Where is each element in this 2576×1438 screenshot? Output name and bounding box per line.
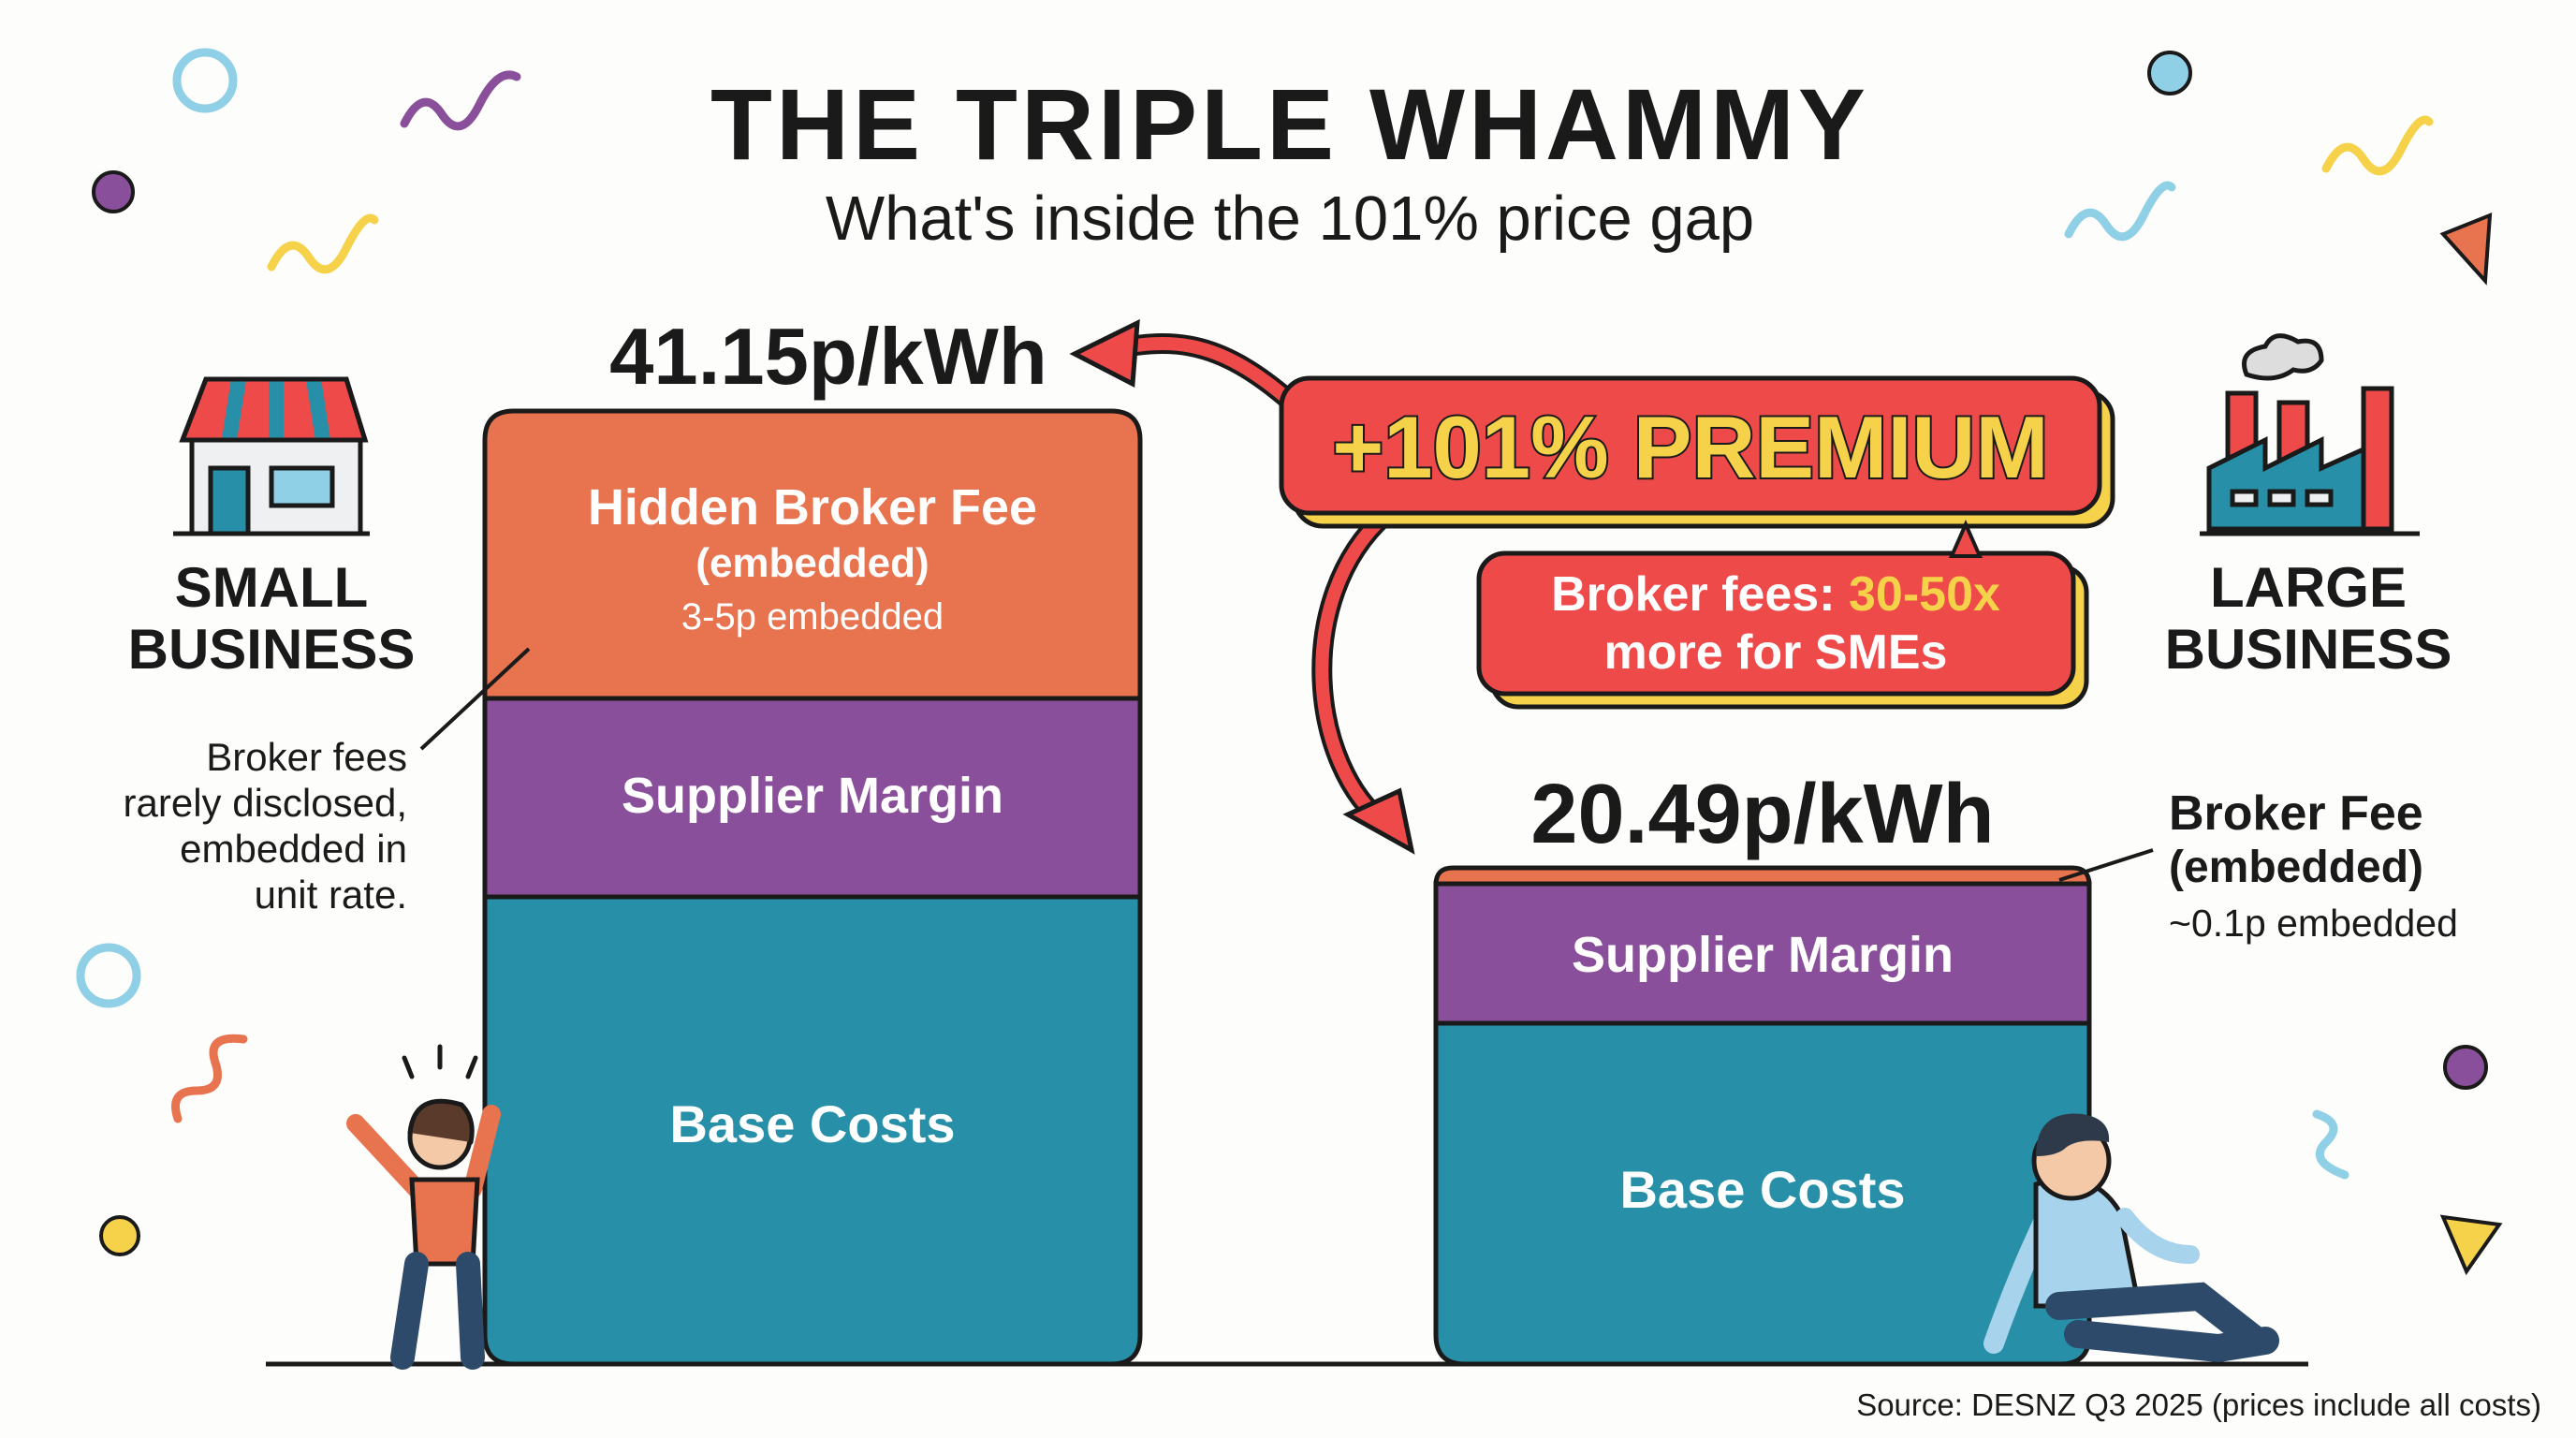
label: large business: LARGE <box>2210 556 2407 619</box>
note: broker fees rarely disclosed <box>124 649 529 917</box>
left bar: small business: 3-5p embedded <box>681 596 944 638</box>
text: BUSINESS <box>128 618 415 681</box>
note: broker fees rarely disclosed: Broker fees <box>206 735 407 779</box>
callout: broker fees 30-50x: Broker fees: 30-50x <box>1551 567 2000 622</box>
decorative confetti <box>80 52 2499 1271</box>
left bar: small business: Base Costs <box>669 1094 956 1153</box>
note: large broker fee: Broker Fee <box>2169 786 2423 841</box>
right price label: 20.49p/kWh <box>1530 768 1995 861</box>
note: large broker fee: ~0.1p embedded <box>2169 902 2458 945</box>
note: broker fees rarely disclosed: rarely disclosed, <box>124 781 407 825</box>
left bar: small business: (embedded) <box>695 540 929 586</box>
baseline <box>266 1361 2308 1367</box>
text: BUSINESS <box>2165 618 2452 681</box>
left price label: 41.15p/kWh <box>609 313 1047 402</box>
callout: broker fees 30-50x <box>1479 524 2086 707</box>
label: small business: SMALL <box>175 556 368 619</box>
note: large broker fee <box>2059 786 2458 945</box>
source: Source: DESNZ Q3 2025 (prices include all costs) <box>1856 1387 2541 1422</box>
person: stressed <box>356 1047 491 1357</box>
arrows <box>1105 344 1385 824</box>
callout: +101% premium <box>1281 378 2113 526</box>
subtitle: What's inside the 101% price gap <box>826 183 1754 254</box>
note: large broker fee: (embedded) <box>2169 843 2423 892</box>
right bar: large business: Base Costs <box>1619 1160 1906 1219</box>
icon: factory <box>2200 336 2420 534</box>
callout: +101% premium: +101% PREMIUM <box>1332 398 2049 496</box>
note: broker fees rarely disclosed: embedded in <box>180 827 407 871</box>
left bar: small business <box>485 411 1140 1364</box>
title: THE TRIPLE WHAMMY <box>710 67 1869 181</box>
callout: broker fees 30-50x: more for SMEs <box>1604 625 1947 680</box>
right bar: large business <box>1436 868 2089 1364</box>
left bar: small business: Supplier Margin <box>622 768 1003 824</box>
person: relaxed <box>1994 1114 2265 1348</box>
note: broker fees rarely disclosed: unit rate. <box>255 873 407 917</box>
left bar: small business: Hidden Broker Fee <box>588 479 1037 536</box>
icon: shop <box>173 379 370 534</box>
right bar: large business: Supplier Margin <box>1572 927 1954 983</box>
